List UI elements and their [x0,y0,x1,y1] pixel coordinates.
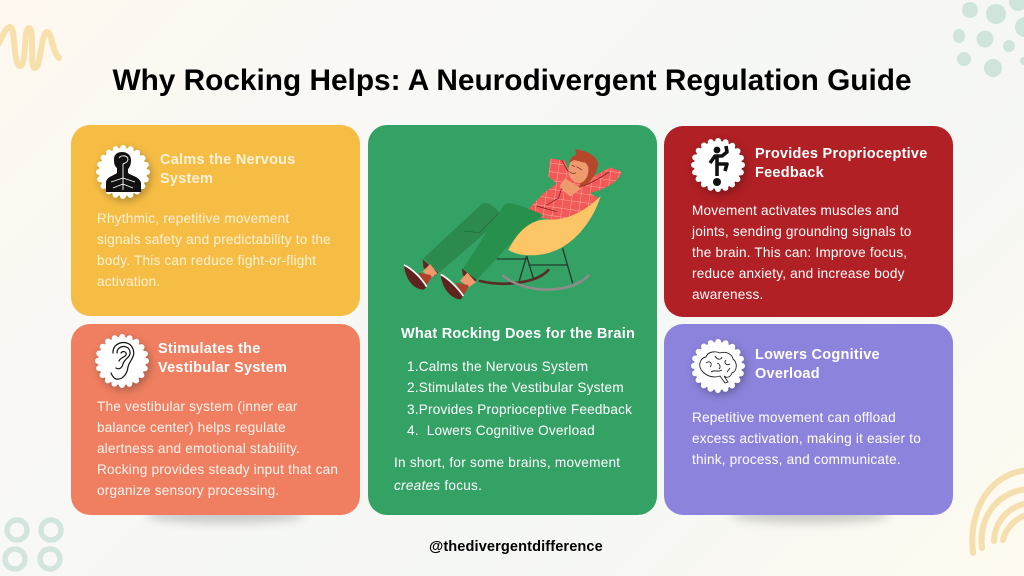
heading [158,341,287,376]
text: activation. [97,274,160,289]
summary: In short, for some brains, movement [394,455,620,470]
icon: nervous system [94,145,156,205]
text [97,211,331,289]
text: excess activation, making it easier to [692,431,921,446]
icon: ear [94,334,154,394]
decoration: rings [2,517,64,572]
decoration: top right dots [953,0,1024,77]
text: the brain. This can: Improve focus, [692,245,907,260]
text [692,410,921,467]
heading: Vestibular System [158,360,287,376]
text: The vestibular system (inner ear [97,399,298,414]
neck and head [559,178,582,197]
back leg [423,203,499,273]
text [97,399,338,498]
icon: balancing figure [690,138,750,198]
numbered list: 3.Provides Proprioceptive Feedback [407,402,632,417]
heading [160,152,296,187]
shirt [528,158,622,222]
back foot [423,259,438,277]
subheading: What Rocking Does for the Brain [401,326,635,342]
numbered list [407,359,632,438]
text: Rhythmic, repetitive movement [97,211,289,226]
text: balance center) helps regulate [97,420,286,435]
text: Repetitive movement can offload [692,410,896,425]
heading: Lowers Cognitive [755,347,880,363]
panel: what rocking does for the brain [368,125,657,515]
icon: brain [690,339,750,399]
title: Why Rocking Helps: A Neurodivergent Regulation Guide [112,64,912,97]
text [692,203,912,302]
decoration: squiggle [0,24,62,71]
text: awareness. [692,287,764,302]
panel: lowers cognitive overload [664,324,953,515]
text: Rocking provides steady input that can [97,462,338,477]
text: organize sensory processing. [97,483,279,498]
heading: Stimulates the [158,341,261,357]
rocker dark [480,270,548,284]
text: body. This can reduce fight-or-flight [97,253,316,268]
card shadows [146,515,890,528]
seat [508,196,601,255]
heading: System [160,171,213,187]
text: Movement activates muscles and [692,203,899,218]
numbered list: 1.Calms the Nervous System [407,359,588,374]
summary: creates focus. [394,478,482,493]
panel: stimulates the vestibular system [71,324,360,515]
heading [755,146,928,181]
heading: Calms the Nervous [160,152,296,168]
text: reduce anxiety, and increase body [692,266,905,281]
heading: Provides Proprioceptive [755,146,928,162]
heading [755,347,880,382]
front leg [463,203,543,280]
heading: Overload [755,366,820,382]
text: joints, sending grounding signals to [692,224,912,239]
numbered list: 2.Stimulates the Vestibular System [407,380,624,395]
panel: calms the nervous system [71,125,360,316]
text: think, process, and communicate. [692,452,901,467]
illustration: person in rocking chair [404,149,622,300]
front foot [462,268,477,284]
summary [394,455,620,493]
text: alertness and emotional stability. [97,441,300,456]
heading: Feedback [755,165,824,181]
decoration: rainbow arcs [969,468,1024,556]
footer handle: @thedivergentdifference [429,539,603,555]
numbered list: 4. Lowers Cognitive Overload [407,423,595,438]
text: signals safety and predictability to the [97,232,331,247]
rocker grey [503,276,588,290]
chair legs [497,248,573,283]
panel: provides proprioceptive feedback [664,126,953,317]
